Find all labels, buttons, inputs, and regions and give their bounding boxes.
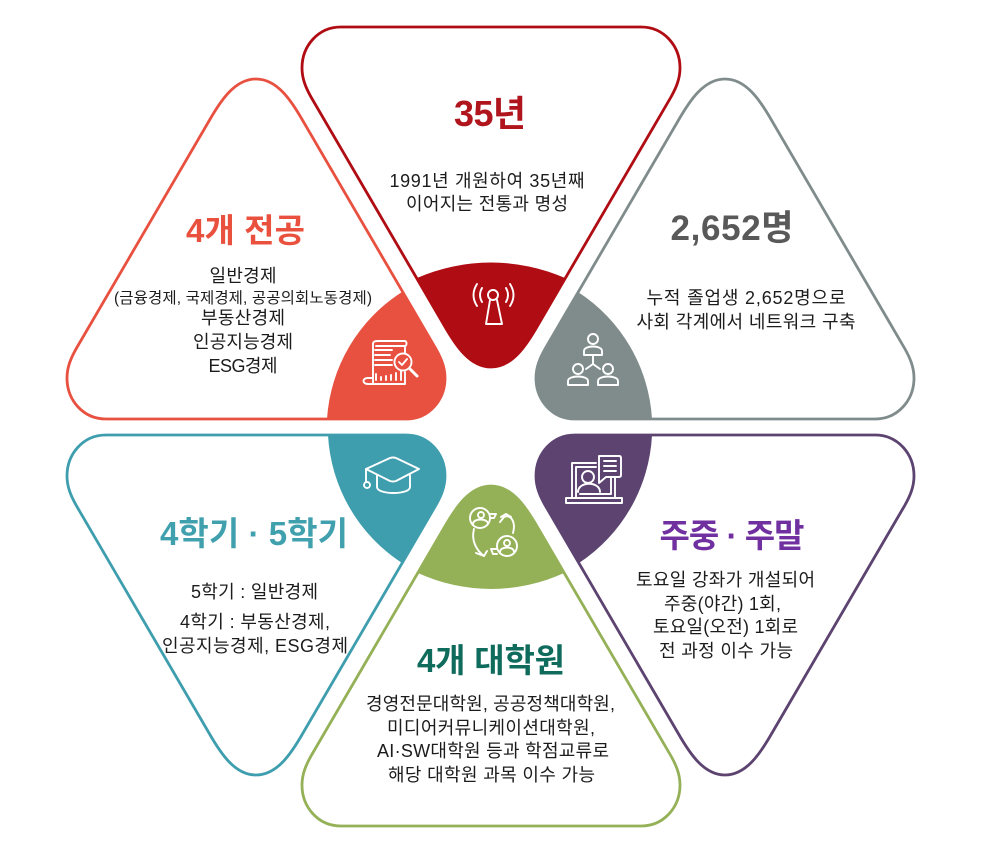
panel: weekday and weekend bbox=[536, 435, 914, 775]
outline: top triangle bbox=[302, 27, 680, 367]
icon: network of people bbox=[568, 334, 618, 385]
text: major list: 인공지능경제 bbox=[193, 332, 293, 352]
text: graduate schools description: AI·SW대학원 등과 학점교류로 bbox=[377, 741, 609, 761]
wedge: lower left bbox=[328, 435, 445, 563]
text: graduates description: 사회 각계에서 네트워크 구축 bbox=[636, 312, 856, 332]
text: 35 years description: 이어지는 전통과 명성 bbox=[406, 194, 568, 214]
text: graduates description: 누적 졸업생 2,652명으로 bbox=[646, 288, 846, 308]
heading: 4개 전공: 4개 전공 bbox=[186, 212, 305, 249]
wedge: upper left bbox=[327, 292, 445, 419]
text: major list bbox=[114, 266, 372, 376]
text: major list: (금융경제, 국제경제, 공공의회노동경제) bbox=[114, 289, 372, 307]
wedge: bottom bbox=[418, 486, 564, 589]
heading: 2,652명: 2,652명 bbox=[670, 209, 794, 248]
heading: 주중 · 주말: 주중 · 주말 bbox=[660, 517, 804, 554]
icon: antenna bbox=[474, 284, 514, 324]
text: semester description: 인공지능경제, ESG경제 bbox=[162, 636, 348, 656]
panel: 2,652 graduates bbox=[536, 79, 914, 419]
text: graduate schools description: 해당 대학원 과목 이수 가능 bbox=[388, 765, 595, 785]
outline: bottom triangle bbox=[302, 486, 680, 826]
outline: upper left triangle bbox=[67, 79, 445, 419]
icon: report with magnifier bbox=[364, 341, 417, 384]
text: schedule description: 토요일(오전) 1회로 bbox=[653, 617, 798, 637]
panel: 35 years bbox=[302, 27, 680, 367]
text: 35 years description bbox=[390, 171, 584, 214]
text: schedule description: 주중(야간) 1회, bbox=[664, 594, 781, 614]
panel: 4 majors bbox=[67, 79, 445, 419]
text: graduate schools description: 경영전문대학원, 공공정책대학원, bbox=[366, 694, 615, 714]
wedge: upper right bbox=[536, 292, 652, 419]
text: schedule description bbox=[636, 570, 815, 661]
text: semester description bbox=[162, 582, 348, 656]
text: major list: 부동산경제 bbox=[201, 308, 285, 328]
text: graduate schools description: 미디어커뮤니케이션대학원, bbox=[387, 718, 595, 738]
text: major list: ESG경제 bbox=[208, 356, 278, 376]
heading: 35년: 35년 bbox=[454, 93, 526, 134]
text: semester description: 5학기 : 일반경제 bbox=[191, 582, 318, 602]
outline: lower left triangle bbox=[67, 435, 445, 775]
icon: online lecture laptop bbox=[566, 456, 622, 503]
text: major list: 일반경제 bbox=[210, 266, 276, 286]
heading: 4개 대학원: 4개 대학원 bbox=[417, 642, 565, 679]
outline: upper right triangle bbox=[536, 79, 914, 419]
icon: graduation cap bbox=[364, 458, 419, 493]
text: schedule description: 토요일 강좌가 개설되어 bbox=[636, 570, 815, 590]
text: graduate schools description bbox=[366, 694, 615, 785]
wedge: lower right bbox=[536, 435, 652, 563]
text: schedule description: 전 과정 이수 가능 bbox=[659, 641, 793, 661]
panel: 4 graduate schools bbox=[302, 486, 680, 826]
text: semester description: 4학기 : 부동산경제, bbox=[180, 612, 330, 632]
outline: lower right triangle bbox=[536, 435, 914, 775]
panel: 4 or 5 semesters bbox=[67, 435, 445, 775]
icon: exchange between people bbox=[470, 508, 517, 556]
text: graduates description bbox=[636, 288, 856, 332]
wedge: top bbox=[417, 263, 565, 367]
text: 35 years description: 1991년 개원하여 35년째 bbox=[390, 171, 584, 191]
heading: 4학기 · 5학기: 4학기 · 5학기 bbox=[160, 515, 348, 552]
